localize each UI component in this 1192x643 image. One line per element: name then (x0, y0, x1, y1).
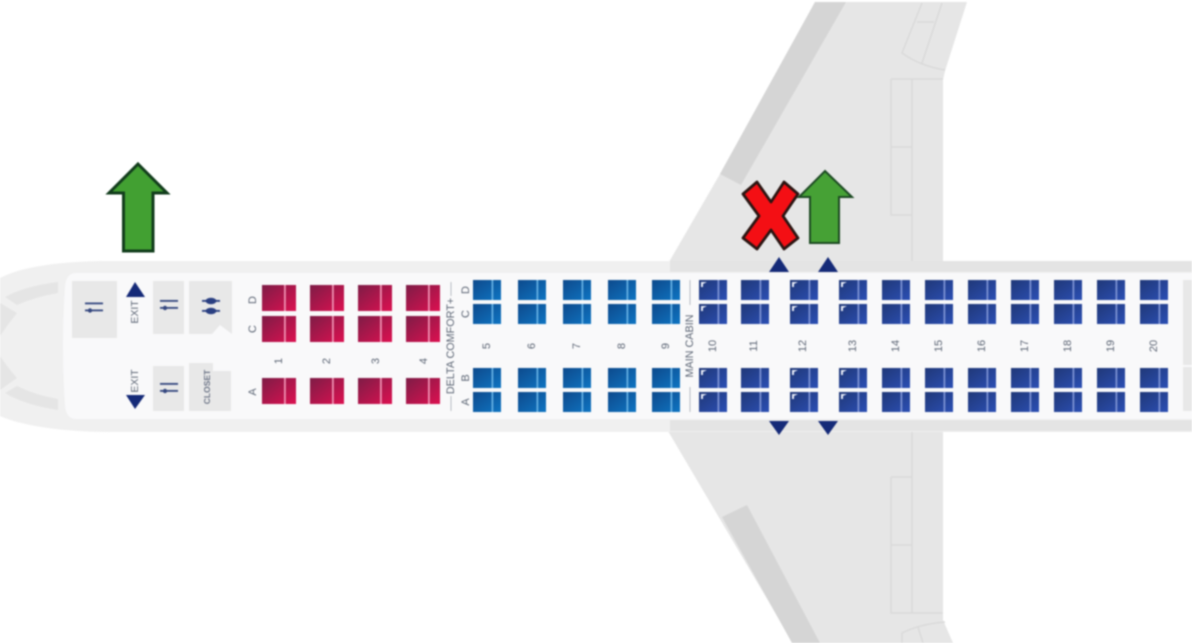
row numbers: 20 (1148, 340, 1160, 352)
closet: CLOSET (202, 369, 212, 404)
icon: small green arrow (799, 171, 852, 243)
row numbers: 16 (976, 340, 988, 352)
fuselage (0, 261, 1192, 432)
seat column letters: D (247, 296, 259, 304)
front exit lower (126, 369, 145, 409)
row numbers: 19 (1105, 340, 1117, 352)
seat column letters: B (460, 374, 472, 382)
front exit upper: EXIT (129, 300, 141, 324)
lower wing panel lines (891, 420, 945, 643)
row numbers: 12 (797, 340, 809, 352)
row numbers: 2 (321, 358, 333, 364)
seat column letters: A (247, 388, 259, 396)
row numbers: 8 (616, 343, 628, 349)
row numbers: 10 (707, 340, 719, 352)
row numbers: 18 (1062, 340, 1074, 352)
upper wing (669, 2, 967, 272)
row numbers: 5 (481, 343, 493, 349)
wing exit markers (769, 257, 838, 435)
seat column letters: C (460, 310, 472, 318)
main cabin section label (684, 280, 696, 412)
front exit upper (126, 282, 145, 324)
rear galley (1183, 280, 1192, 411)
seat column letters (247, 286, 472, 406)
galleys and closet (72, 281, 232, 411)
row numbers: 9 (660, 343, 672, 349)
seat column letters: C (247, 325, 259, 333)
seat column letters: A (460, 398, 472, 406)
closet (189, 363, 231, 411)
row numbers: 17 (1019, 340, 1031, 352)
row numbers: 14 (890, 340, 902, 352)
main cabin section label: MAIN CABIN (684, 314, 696, 378)
main cabin seats (699, 280, 1168, 412)
row numbers: 4 (418, 358, 430, 364)
upper wing panel lines (891, 3, 945, 272)
galley lower (153, 366, 184, 411)
lower wing flap (722, 505, 820, 643)
cabin floor (63, 273, 1192, 419)
galley upper (153, 281, 184, 334)
nose windshield shapes (0, 282, 58, 410)
comfort seats (473, 280, 680, 412)
row numbers: 13 (847, 340, 859, 352)
row numbers (273, 340, 1160, 364)
lavatory (189, 281, 232, 334)
row numbers: 15 (933, 340, 945, 352)
front exit lower: EXIT (129, 369, 141, 393)
row numbers: 6 (526, 343, 538, 349)
first class seats (262, 285, 440, 404)
galley front (72, 281, 117, 338)
row numbers: 11 (748, 340, 760, 352)
row numbers: 3 (370, 358, 382, 364)
row numbers: 7 (571, 343, 583, 349)
row numbers: 1 (273, 358, 285, 364)
lower wing (668, 420, 953, 643)
icon: large green arrow (109, 164, 167, 251)
seat column letters: D (460, 286, 472, 294)
delta comfort section label: DELTA COMFORT+ (445, 298, 457, 394)
icon: red X (743, 182, 798, 249)
upper wing flap (720, 2, 846, 185)
